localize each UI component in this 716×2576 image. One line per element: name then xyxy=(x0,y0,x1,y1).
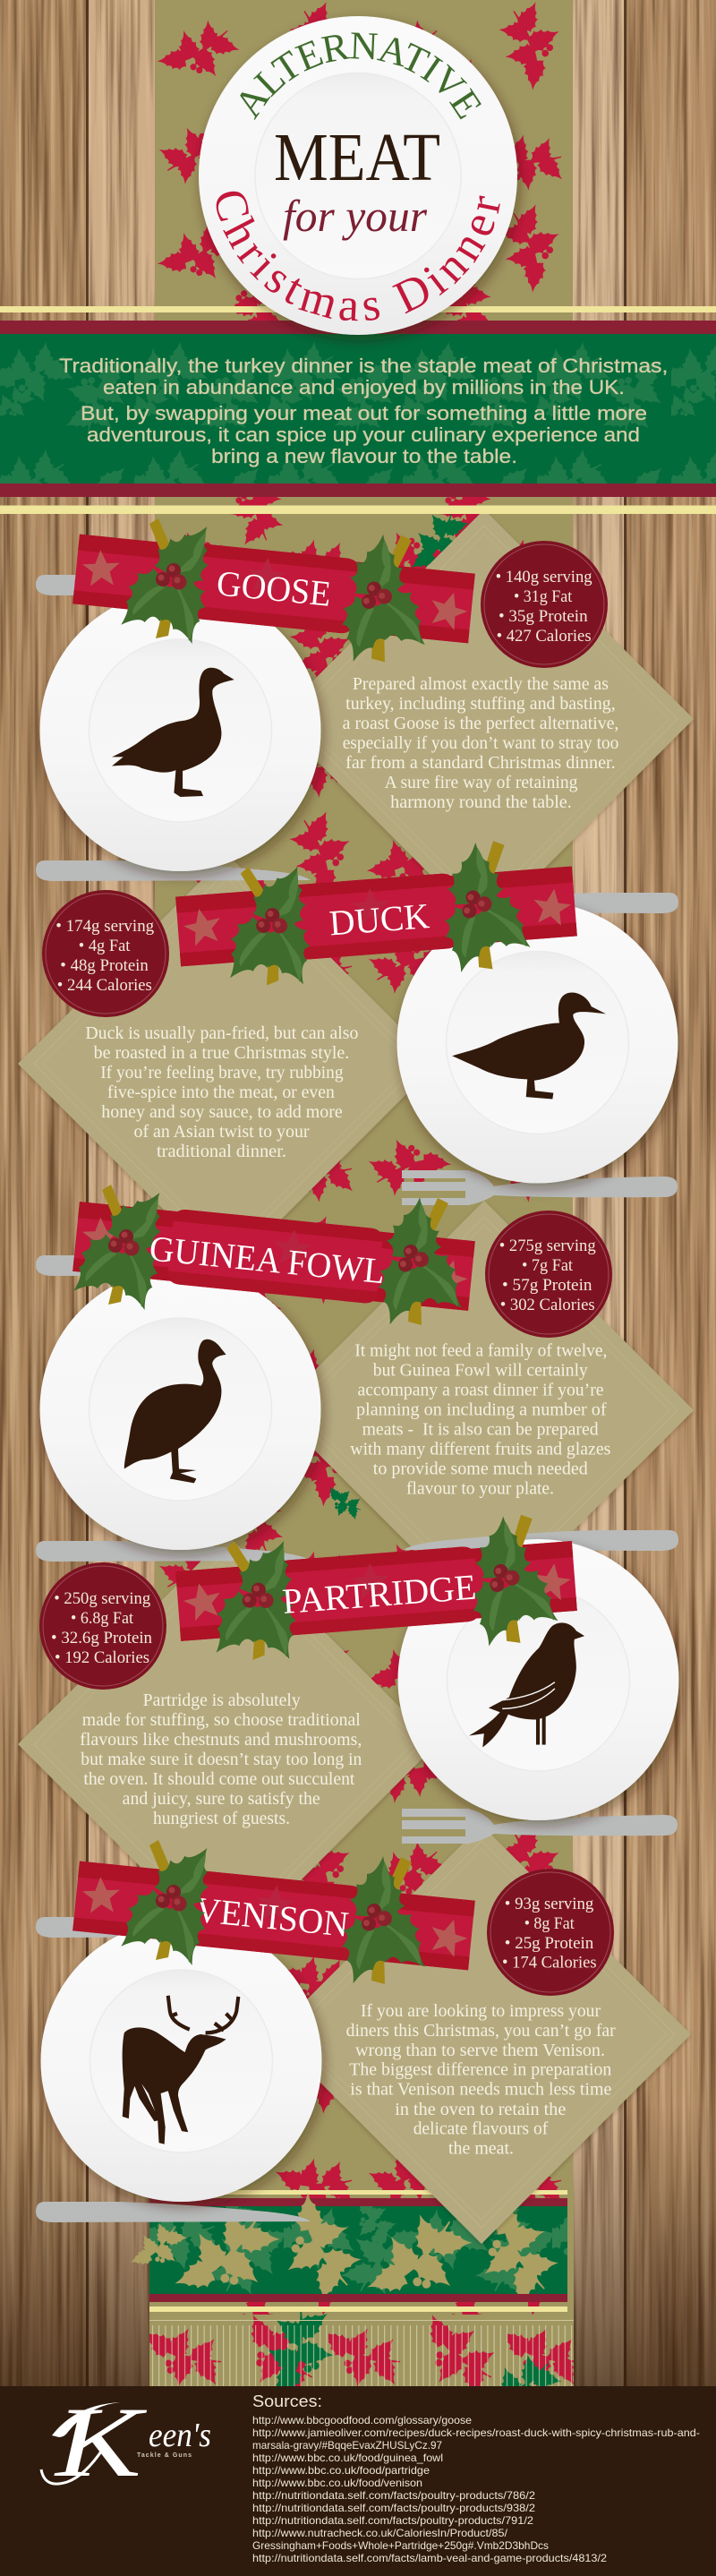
holly: partridge right xyxy=(401,1482,601,1687)
sources heading: Sources: xyxy=(252,2392,322,2410)
text: duck: Duck is usually pan-fried, but can also xyxy=(85,1024,358,1043)
stats: partridge: • 250g serving xyxy=(54,1589,151,1608)
title: ALTERNATIVE: ALTERNATIVE xyxy=(240,32,482,120)
holly: duck left xyxy=(192,846,342,1008)
napkin: partridge xyxy=(18,1535,437,1954)
text: venison: delicate flavours of xyxy=(413,2120,549,2138)
stats: venison xyxy=(487,1869,614,1996)
text: partridge: Partridge is absolutely xyxy=(143,1691,301,1710)
label: VENISON: VENISON xyxy=(193,1889,351,1945)
sources list: http://nutritiondata.self.com/facts/poultry-products/791/2 xyxy=(252,2514,533,2527)
stats: venison: • 93g serving xyxy=(505,1895,594,1913)
table runner with holly pattern xyxy=(149,0,574,2419)
intro text: bring a new flavour to the table. xyxy=(211,445,517,467)
text: duck: five-spice into the meat, or even xyxy=(107,1083,335,1102)
cutlery: goose xyxy=(36,575,311,881)
text: guinea fowl: It might not feed a family of twelve, xyxy=(354,1341,607,1361)
stats: goose: • 31g Fat xyxy=(514,587,573,606)
stats: guinea fowl: • 302 Calories xyxy=(500,1296,595,1314)
holly: venison right xyxy=(283,1832,462,2016)
text: partridge: hungriest of guests. xyxy=(153,1810,290,1828)
napkin: goose xyxy=(275,509,694,929)
intro text: But, by swapping your meat out for something a little more xyxy=(81,402,647,424)
stats: duck: • 4g Fat xyxy=(79,937,131,955)
intro text: adventurous, it can spice up your culinary experience and xyxy=(87,424,640,446)
plate: partridge xyxy=(397,1539,678,1820)
text: venison: is that Venison needs much less time xyxy=(350,2081,611,2099)
text: goose: a roast Goose is the perfect alternative, xyxy=(343,715,618,733)
sources list: http://nutritiondata.self.com/facts/poultry-products/938/2 xyxy=(252,2502,535,2514)
intro stripes: yellow and red bands xyxy=(0,306,716,514)
icon: goose silhouette xyxy=(112,668,234,797)
text: guinea fowl xyxy=(350,1341,610,1499)
title: Christmas Dinner: Christmas Dinner xyxy=(217,192,500,321)
sources list xyxy=(252,2414,700,2564)
plate: guinea fowl xyxy=(39,1269,320,1550)
footer xyxy=(0,2386,716,2576)
stats: partridge xyxy=(39,1562,166,1690)
plate: venison xyxy=(41,1921,322,2202)
section: goose xyxy=(36,509,618,881)
napkin: venison xyxy=(272,1825,691,2244)
stats: goose xyxy=(481,541,608,668)
cracker: guinea fowl xyxy=(55,1173,499,1357)
text: duck: If you’re feeling brave, try rubbing xyxy=(100,1064,344,1083)
stats: guinea fowl: • 275g serving xyxy=(499,1237,596,1255)
holly: partridge left xyxy=(178,1521,328,1682)
cutlery: venison xyxy=(36,1917,311,2222)
text: guinea fowl: meats - It is also can be prepared xyxy=(362,1420,599,1440)
stats: duck: • 244 Calories xyxy=(57,976,152,995)
text: venison: The biggest difference in preparation xyxy=(349,2061,612,2079)
text: goose: Prepared almost exactly the same as xyxy=(353,675,609,694)
sources list: http://www.jamieoliver.com/recipes/duck-recipes/roast-duck-with-spicy-christmas-rub-and- xyxy=(252,2426,700,2439)
sources list: http://www.nutracheck.co.uk/CaloriesIn/Product/85/ xyxy=(252,2527,508,2539)
holly: goose left xyxy=(102,510,230,652)
text: partridge: made for stuffing, so choose traditional xyxy=(82,1711,361,1730)
text: goose: turkey, including stuffing and basting, xyxy=(345,695,616,714)
text: goose xyxy=(343,675,618,812)
label: GOOSE: GOOSE xyxy=(215,562,333,614)
text: duck: honey and soy sauce, to add more xyxy=(101,1103,343,1122)
icon: duck silhouette xyxy=(452,992,606,1099)
text: guinea fowl: planning on including a number of xyxy=(356,1400,607,1420)
title: MEAT: MEAT xyxy=(274,120,440,195)
text: venison: diners this Christmas, you can’t go far xyxy=(346,2022,616,2041)
stats: guinea fowl: • 7g Fat xyxy=(522,1256,574,1275)
sources list: http://www.bbc.co.uk/food/guinea_fowl xyxy=(252,2452,443,2464)
intro text: eaten in abundance and enjoyed by millions in the UK. xyxy=(103,376,625,398)
label: DUCK: DUCK xyxy=(328,895,430,943)
sources list: http://www.bbcgoodfood.com/glossary/goose xyxy=(252,2414,472,2426)
stats: partridge: • 6.8g Fat xyxy=(71,1609,134,1628)
text: guinea fowl: accompany a roast dinner if you’re xyxy=(358,1381,603,1400)
napkin layer xyxy=(18,509,694,2244)
stats: duck: • 48g Protein xyxy=(60,956,149,975)
cutlery: guinea fowl xyxy=(36,1255,311,1562)
bottom green band xyxy=(124,2187,572,2312)
section: duck xyxy=(42,809,678,1205)
cracker: goose xyxy=(72,509,475,694)
sources list: http://www.bbc.co.uk/food/partridge xyxy=(252,2464,430,2477)
text: partridge: the oven. It should come out succulent xyxy=(83,1770,355,1789)
holly: goose right xyxy=(283,509,462,694)
cutlery: partridge xyxy=(402,1530,678,1844)
holly: venison left xyxy=(102,1832,230,1973)
text: goose: far from a standard Christmas dinner. xyxy=(345,754,616,773)
text: goose: especially if you don’t want to stray too xyxy=(343,734,618,753)
holly: guinea fowl left xyxy=(55,1177,183,1318)
logo: Keen's: Tackle & Guns xyxy=(137,2452,192,2459)
text: guinea fowl: with many different fruits and glazes xyxy=(350,1440,610,1459)
icon: guinea fowl silhouette xyxy=(124,1339,226,1483)
text: venison xyxy=(346,2002,616,2158)
intro text xyxy=(59,355,668,467)
stats: venison: • 8g Fat xyxy=(524,1914,575,1933)
stats: partridge: • 192 Calories xyxy=(55,1648,149,1667)
text: partridge: and juicy, sure to satisfy the xyxy=(123,1790,320,1809)
text: venison: If you are looking to impress your xyxy=(361,2002,601,2021)
sources list: http://www.bbc.co.uk/food/venison xyxy=(252,2477,422,2489)
title: for your: for your xyxy=(283,191,428,241)
label: PARTRIDGE: PARTRIDGE xyxy=(281,1567,478,1622)
text: venison: wrong than to serve them Venison. xyxy=(355,2041,605,2060)
text: partridge: but make sure it doesn’t stay too long in xyxy=(81,1750,362,1769)
title plate xyxy=(194,14,527,346)
sources list: marsala-gravy/#BqqeEvaxZHUSLyCz.97 xyxy=(252,2439,442,2452)
cutlery: duck xyxy=(402,893,678,1205)
stats: venison: • 25g Protein xyxy=(505,1934,594,1953)
text: duck: of an Asian twist to your xyxy=(134,1123,310,1142)
intro panel: green band xyxy=(0,334,716,484)
stats: duck: • 174g serving xyxy=(55,917,155,936)
text: guinea fowl: but Guinea Fowl will certainly xyxy=(373,1361,588,1381)
cracker: partridge xyxy=(175,1482,601,1687)
text: venison: in the oven to retain the xyxy=(395,2101,566,2119)
plate: duck xyxy=(397,903,678,1184)
text: venison: the meat. xyxy=(448,2140,514,2158)
text: duck: traditional dinner. xyxy=(157,1143,286,1161)
stats: goose: • 140g serving xyxy=(496,568,592,586)
stats: partridge: • 32.6g Protein xyxy=(51,1629,152,1647)
text: guinea fowl: flavour to your plate. xyxy=(406,1479,554,1499)
text: partridge xyxy=(80,1691,362,1828)
icon: venison silhouette xyxy=(123,1996,238,2144)
stats: venison: • 174 Calories xyxy=(502,1954,597,1972)
stats: goose: • 35g Protein xyxy=(499,607,588,626)
stats: goose: • 427 Calories xyxy=(497,627,592,646)
text: duck xyxy=(85,1024,358,1161)
section: partridge xyxy=(39,1482,678,1844)
text: partridge: flavours like chestnuts and mushrooms, xyxy=(80,1731,362,1750)
sources list: http://nutritiondata.self.com/facts/lamb-veal-and-game-products/4813/2 xyxy=(252,2552,607,2564)
logo: Keen's: een's xyxy=(149,2417,211,2454)
stats: duck xyxy=(42,890,169,1017)
holly: guinea fowl right xyxy=(320,1173,499,1357)
cracker: venison xyxy=(72,1832,475,2016)
icon: partridge silhouette xyxy=(469,1622,584,1747)
holly: duck right xyxy=(373,809,574,1014)
stats: guinea fowl xyxy=(485,1211,612,1338)
text: goose: harmony round the table. xyxy=(390,793,572,812)
sources list: http://nutritiondata.self.com/facts/poultry-products/786/2 xyxy=(252,2489,535,2502)
section: venison xyxy=(36,1832,616,2222)
stats: guinea fowl: • 57g Protein xyxy=(502,1276,592,1295)
napkin: guinea fowl xyxy=(275,1201,694,1620)
napkin: duck xyxy=(18,854,437,1273)
text: guinea fowl: to provide some much needed xyxy=(373,1459,588,1479)
logo: Keen's: K xyxy=(53,2387,148,2498)
intro text: Traditionally, the turkey dinner is the staple meat of Christmas, xyxy=(59,355,668,377)
text: duck: be roasted in a true Christmas style. xyxy=(94,1044,349,1063)
cracker: duck xyxy=(175,809,577,1014)
sources list: Gressingham+Foods+Whole+Partridge+250g#.Vmb2D3bhDcs xyxy=(252,2539,549,2552)
plate: goose xyxy=(39,590,320,871)
section: guinea fowl xyxy=(36,1173,612,1562)
text: goose: A sure fire way of retaining xyxy=(385,774,578,792)
label: GUINEA FOWL: GUINEA FOWL xyxy=(148,1228,387,1291)
logo: Keen's xyxy=(41,2387,211,2498)
